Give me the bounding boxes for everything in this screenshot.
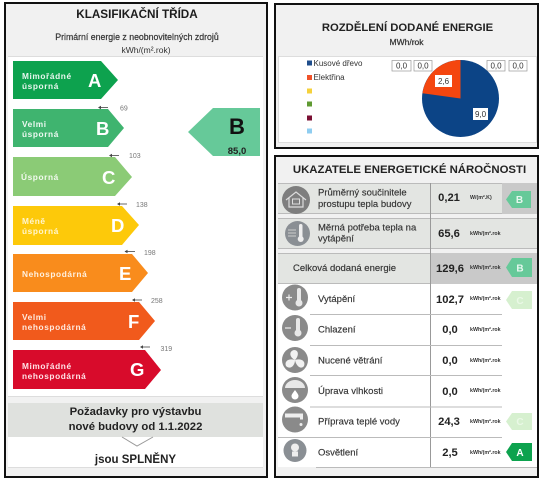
class G arrow: Mimořádné	[22, 361, 72, 371]
class E arrow: E	[119, 263, 131, 284]
row: specific heat demand: vytápění	[318, 234, 354, 244]
pie labels: 2,6	[438, 77, 450, 86]
result text: jsou SPLNĚNY	[95, 454, 176, 466]
row: humidity: 0,0	[442, 386, 458, 398]
unit label: kWh/(m².rok)	[121, 45, 171, 55]
result marker: class B 85,0: B	[229, 114, 245, 139]
class A arrow: A	[88, 70, 101, 91]
row 2 background	[278, 218, 537, 249]
row 3 value background	[430, 253, 537, 284]
class D arrow: Méně	[22, 216, 46, 226]
row: specific heat demand: 65,6	[438, 228, 460, 240]
row: forced ventilation: 0,0	[442, 355, 458, 367]
panel: delivered energy	[274, 3, 539, 149]
class D arrow	[13, 206, 139, 245]
row 1 badge background	[502, 183, 537, 214]
legend: Kusové dřevo	[314, 59, 363, 68]
threshold 319: 319	[160, 346, 172, 353]
row: average heat transfer: Průměrný součinitele	[318, 188, 407, 198]
badge B	[506, 258, 532, 277]
class F arrow: nehospodárná	[22, 322, 86, 332]
badge B: B	[516, 264, 524, 274]
requirements text: Požadavky pro výstavbu	[70, 406, 201, 418]
threshold 103: 103	[129, 153, 141, 160]
requirements text	[69, 406, 202, 432]
threshold 258: 258	[151, 298, 163, 305]
row: heating: kWh/(m².rok	[470, 296, 501, 302]
badge B: B	[516, 195, 523, 206]
icon: light bulb	[284, 439, 306, 462]
result marker: class B 85,0	[188, 108, 260, 157]
class A arrow: úsporná	[22, 81, 59, 91]
requirements box	[8, 403, 263, 437]
row: total delivered energy: kWh/(m².rok	[470, 265, 501, 271]
threshold 198: 198	[144, 250, 156, 257]
class C arrow: Úsporná	[21, 171, 59, 182]
row: hot water	[282, 406, 532, 432]
scale arrows chart	[13, 61, 260, 446]
threshold 258	[132, 298, 163, 305]
row: forced ventilation	[282, 347, 501, 373]
threshold 319	[140, 345, 172, 353]
class F arrow: Velmi	[22, 312, 47, 322]
row: average heat transfer	[282, 186, 531, 214]
subheading: primary energy: Primární energie z neobnovitelných zdrojů	[55, 32, 219, 42]
icon: umbrella drop	[282, 377, 308, 403]
row: heating: 102,7	[436, 294, 464, 306]
threshold 198	[124, 250, 156, 257]
row: cooling: Chlazení	[318, 324, 356, 336]
badge A: A	[516, 448, 524, 459]
legend: Elektřina	[314, 73, 345, 82]
row: average heat transfer: prostupu tepla budovy	[318, 199, 412, 210]
icon: thermometer plus	[282, 284, 308, 310]
row: specific heat demand	[285, 221, 501, 246]
class E arrow: Nehospodárná	[22, 269, 87, 279]
badge C	[506, 291, 532, 309]
row: heating	[282, 284, 532, 310]
threshold 138: 138	[136, 202, 148, 209]
heading: energy indicators: UKAZATELE ENERGETICKÉ NÁROČNOSTI	[293, 164, 526, 176]
row: lighting: 2,5	[442, 447, 458, 459]
class A arrow	[13, 61, 118, 99]
unit label: MWh/rok	[390, 37, 424, 47]
row: lighting	[284, 439, 532, 462]
threshold 138	[117, 202, 148, 209]
class B arrow: Velmi	[22, 119, 47, 129]
class B arrow: B	[96, 118, 109, 139]
row: total delivered energy	[293, 258, 532, 277]
heading: delivered energy: ROZDĚLENÍ DODANÉ ENERGIE	[322, 22, 493, 34]
panel: classification	[4, 2, 268, 478]
row: average heat transfer: W/(m².K)	[470, 195, 492, 201]
table lines	[278, 183, 537, 468]
row: humidity: Úprava vlhkosti	[318, 386, 383, 397]
row: lighting: kWh/(m².rok	[470, 450, 501, 456]
row: cooling: 0,0	[442, 324, 458, 336]
pie labels	[435, 75, 488, 120]
row: specific heat demand: kWh/(m².rok	[470, 231, 501, 237]
threshold 69: 69	[120, 106, 128, 112]
icon: radiator thermometer	[285, 221, 310, 246]
badge B	[506, 191, 531, 208]
badge A	[506, 443, 532, 461]
row 3 background	[278, 253, 537, 284]
zero value boxes: 0,0	[396, 62, 408, 70]
class F arrow: F	[128, 311, 139, 332]
row: hot water: 24,3	[438, 416, 460, 428]
result box	[8, 437, 263, 468]
class C arrow: C	[102, 167, 115, 188]
panel: energy indicators	[274, 155, 539, 478]
class D arrow: úsporná	[22, 226, 59, 236]
zero value boxes: 0,0	[417, 62, 429, 70]
class A arrow: Mimořádné	[22, 71, 72, 81]
row: forced ventilation: Nucené větrání	[318, 356, 383, 366]
class F arrow	[13, 302, 155, 340]
icon: tap	[282, 406, 308, 432]
class G arrow: nehospodárná	[22, 371, 86, 381]
row: hot water: kWh/(m².rok	[470, 419, 501, 425]
row: specific heat demand: Měrná potřeba tepla na	[318, 222, 417, 234]
pie labels: 9,0	[475, 110, 487, 119]
requirements text: nové budovy od 1.1.2022	[69, 420, 202, 432]
row: total delivered energy: Celková dodaná energie	[293, 263, 396, 274]
class C arrow	[13, 157, 132, 196]
row: average heat transfer: 0,21	[438, 192, 460, 204]
result marker: class B 85,0: 85,0	[228, 146, 246, 157]
white body	[278, 284, 537, 467]
zero value boxes	[392, 60, 527, 71]
zero value boxes: 0,0	[512, 62, 524, 70]
zero value boxes: 0,0	[490, 62, 502, 70]
threshold 69	[98, 106, 128, 112]
class B arrow	[13, 109, 124, 147]
row: heating: Vytápění	[318, 294, 356, 305]
chevron pointer	[122, 437, 153, 446]
class E arrow	[13, 254, 148, 292]
badge C: C	[516, 417, 524, 428]
row: lighting: Osvětlení	[318, 448, 358, 458]
white chart area	[8, 56, 263, 397]
row 1 background	[278, 183, 502, 214]
class D arrow: D	[111, 215, 124, 236]
white chart area	[278, 56, 537, 143]
legend	[307, 59, 363, 134]
class B arrow: úsporná	[22, 129, 59, 139]
icon: thermometer minus	[282, 315, 308, 341]
pie chart and legend	[307, 59, 528, 137]
row: forced ventilation: kWh/(m².rok	[470, 358, 501, 364]
icon: house	[282, 186, 310, 214]
row: total delivered energy: 129,6	[436, 263, 464, 275]
class G arrow: G	[130, 359, 144, 380]
row: cooling	[282, 315, 501, 341]
row: humidity: kWh/(m².rok	[470, 388, 501, 394]
pie	[422, 60, 499, 137]
badge C	[506, 413, 532, 430]
badge C: C	[516, 296, 524, 307]
row: cooling: kWh/(m².rok	[470, 327, 501, 333]
row: hot water: Příprava teplé vody	[318, 416, 400, 428]
class G arrow	[13, 350, 161, 389]
heading: classification: KLASIFIKAČNÍ TŘÍDA	[76, 8, 198, 21]
threshold 103	[109, 153, 141, 160]
row: humidity	[282, 377, 501, 403]
icon: fan	[282, 347, 308, 373]
